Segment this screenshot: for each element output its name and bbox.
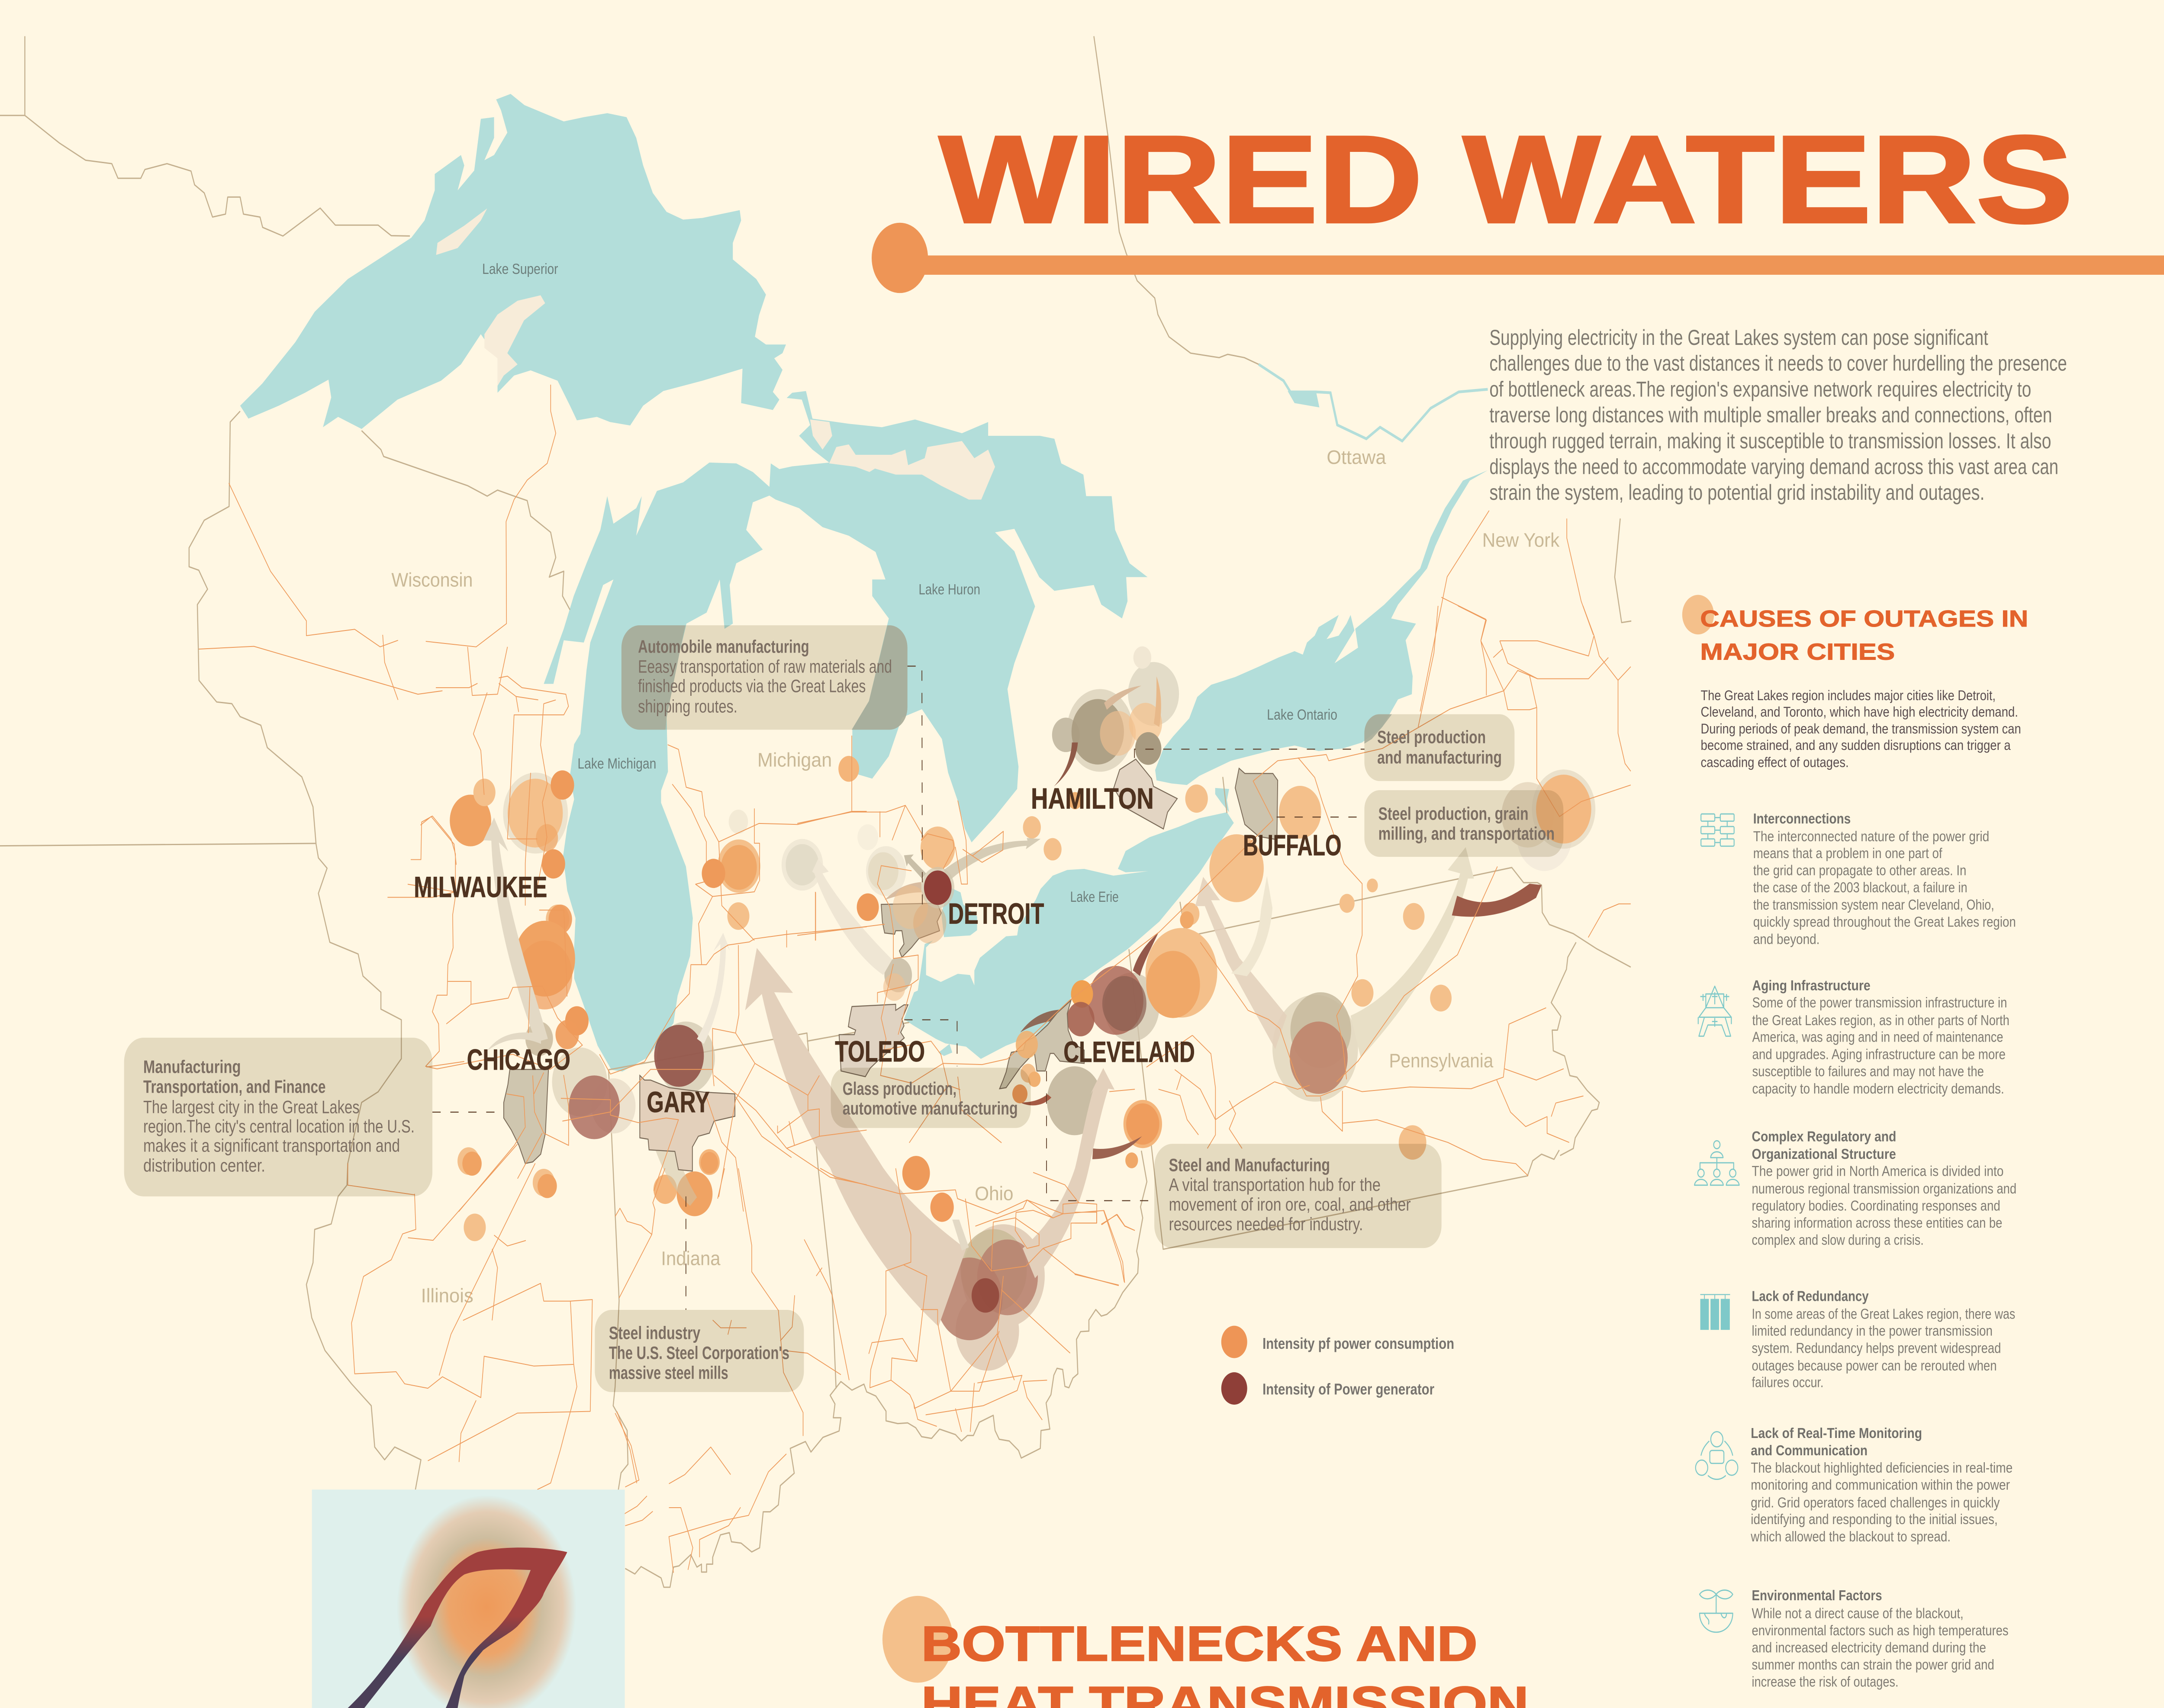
intro paragraph: challenges due to the vast distances it needs to cover hurdelling the presence [1489,351,2067,376]
hamilton up arrow [1154,676,1161,727]
callout: steel and manufacturing: resources needed for industry. [1169,1214,1363,1234]
state and place names: Lake Michigan [578,755,656,772]
niagara water [1215,788,1229,812]
item: environmental factors: summer months can strain the power grid and [1752,1657,1994,1673]
item: environmental factors: environmental factors such as high temperatures [1752,1623,2009,1639]
intro paragraph: traverse long distances with multiple smaller breaks and connections, often [1489,403,2052,427]
city names: GARY [647,1085,710,1118]
panel: causes of outages [1682,595,2028,1690]
title [872,110,2164,293]
heading [1700,606,2028,665]
item: lack of real-time monitoring: monitoring and communication within the power [1751,1477,2010,1493]
callout: steel production hamilton: Steel production [1377,727,1486,747]
buffalo shape [1235,768,1278,840]
bottleneck swoosh [348,1547,567,1708]
callout: steel production buffalo: milling, and transportation [1378,823,1555,843]
callout: steel industry [595,1310,804,1392]
callout: automobile manufacturing: Automobile manufacturing [638,637,809,657]
item: lack of redundancy: limited redundancy in the power transmission [1752,1323,1993,1339]
region paragraph: The Great Lakes region includes major cities like Detroit, [1701,688,1996,704]
state and place names: Lake Superior [482,261,558,277]
item: interconnections: Interconnections [1753,811,1851,827]
icon: org chart [1694,1141,1739,1185]
icon: server racks [1700,1295,1730,1330]
item: interconnections: the grid can propagate to other areas. In [1753,863,1966,878]
lake superior [240,94,786,429]
ottawa river widening [1288,391,1319,407]
intro paragraph: through rugged terrain, making it susceptible to transmission losses. It also [1489,429,2051,453]
item: lack of redundancy: outages because power can be rerouted when [1752,1358,1997,1373]
item: aging infrastructure: Some of the power transmission infrastructure in [1752,995,2007,1011]
state and place names [391,261,1560,1306]
detroit overlay bubbles [893,867,954,944]
item: environmental factors [1700,1588,2009,1690]
keweenaw peninsula [484,295,545,386]
item: environmental factors: Environmental Factors [1752,1588,1882,1604]
icon: network nodes [1701,814,1734,846]
small arrow below cleveland [1020,1094,1051,1105]
drummond island [810,419,832,450]
state and place names: Lake Huron [918,581,980,598]
item: lack of real-time monitoring: and Communication [1751,1443,1868,1459]
state and place names: Indiana [661,1247,721,1269]
item: interconnections: quickly spread throughout the Great Lakes region [1753,914,2016,930]
item: lack of real-time monitoring [1696,1426,2013,1545]
city names [414,782,1341,1118]
callout lake tint [621,620,911,732]
item: complex regulatory structure: The power grid in North America is divided into [1752,1164,2003,1179]
arrow ohio to cleveland [1023,1068,1114,1278]
sandusky inlet [938,1044,952,1056]
legend: power consumption: Intensity pf power consumption [1262,1335,1454,1352]
callout: steel industry: The U.S. Steel Corporation's [609,1343,789,1363]
item: interconnections: the case of the 2003 blackout, a failure in [1753,880,1968,896]
city outlines [504,759,1278,1171]
item: aging infrastructure: the Great Lakes region, as in other parts of North [1752,1013,2009,1029]
intro paragraph: Supplying electricity in the Great Lakes system can pose significant [1489,325,1988,350]
item: complex regulatory structure: complex and slow during a crisis. [1752,1232,1924,1248]
callout: chicago manufacturing: Manufacturing [143,1057,241,1077]
heading dot [1682,595,1714,634]
region paragraph: become strained, and any sudden disruptions can trigger a [1701,738,2011,753]
item: complex regulatory structure: Complex Regulatory and [1752,1129,1896,1145]
callout: chicago manufacturing: region.The city's central location in the U.S. [143,1116,415,1136]
item: aging infrastructure: America, was aging and in need of maintenance [1752,1029,2003,1045]
state and national borders [0,36,1631,1587]
callout: steel industry: Steel industry [609,1323,700,1343]
cleveland shape [1000,1000,1084,1089]
item: complex regulatory structure: numerous regional transmission organizations and [1752,1181,2016,1197]
item: lack of redundancy [1700,1289,2015,1390]
item: lack of real-time monitoring: identifying and responding to the initial issues, [1751,1512,1998,1528]
state and place names: New York [1482,529,1560,551]
item: interconnections: means that a problem in one part of [1753,846,1942,862]
region paragraph: Cleveland, and Toronto, which have high electricity demand. [1701,704,2018,720]
manitoulin island [829,441,995,499]
item: lack of redundancy: In some areas of the Great Lakes region, there was [1752,1306,2015,1322]
city names: MILWAUKEE [414,870,547,904]
section heading: bottlenecks and heat transmission [882,1596,1529,1708]
callout: chicago manufacturing: distribution center. [143,1155,265,1175]
region paragraph: cascading effect of outages. [1701,755,1849,770]
ottawa river [1259,364,1488,441]
small arrow to 44 [1092,1136,1142,1159]
callout: chicago manufacturing: makes it a significant transportation and [143,1135,400,1155]
michigan faint arrow [812,859,892,975]
faint arrow to buffalo [1231,876,1272,976]
callout: steel production buffalo [1364,790,1563,857]
map: great lakes water [240,94,1488,1071]
state and place names: Ohio [975,1182,1014,1204]
ohio faint arrow [952,1219,969,1251]
arrow pittsburgh to east [1351,847,1474,1058]
state and place names: Wisconsin [391,569,473,591]
item: aging infrastructure: Aging Infrastructure [1752,978,1871,994]
gary shape [640,1075,735,1171]
item: environmental factors: and increased electricity demand during the [1752,1640,1986,1656]
detroit shape [881,903,941,957]
callout: steel production hamilton [1364,710,1514,781]
heat glow [397,1495,576,1708]
isle royale [436,209,487,255]
state and place names: Lake Erie [1070,888,1119,905]
icon: communication circle [1696,1431,1738,1480]
big arrow ohio to toledo [745,948,966,1326]
legend [1221,1326,1454,1405]
lake st clair [941,887,977,937]
title: WIRED WATERS [939,110,2073,249]
arrow pittsburgh to erie [1195,877,1287,1049]
callout: steel and manufacturing [1154,1144,1442,1248]
toledo shape [839,1004,908,1077]
lake erie [904,812,1234,1059]
item: environmental factors: While not a direct cause of the blackout, [1752,1606,1964,1621]
callout: steel and manufacturing: A vital transportation hub for the [1169,1174,1381,1195]
legend: power generator [1221,1372,1434,1405]
panel: bottleneck heat illustration [312,1489,625,1708]
milwaukee arrow [483,817,548,1042]
callout lake tint [1364,714,1392,743]
detroit left arrow [885,882,921,900]
city names: BUFFALO [1243,829,1341,862]
state and place names: Lake Ontario [1267,706,1337,723]
item: lack of real-time monitoring: which allowed the blackout to spread. [1750,1529,1951,1545]
item: interconnections: the transmission system near Cleveland, Ohio, [1753,897,1994,913]
chicago small arrow [487,1033,541,1051]
state and place names: Ottawa [1327,446,1386,468]
city names: HAMILTON [1031,782,1154,815]
item: aging infrastructure: and upgrades. Aging infrastructure can be more [1752,1047,2006,1062]
item: interconnections: and beyond. [1753,932,1819,947]
callout: glass production: Glass production, [843,1078,956,1099]
hamilton dark arrow [1054,743,1078,786]
item: lack of redundancy: system. Redundancy helps prevent widespread [1752,1341,2001,1356]
intro paragraph: of bottleneck areas.The region's expansive network requires electricity to [1489,377,2031,401]
city names: CHICAGO [467,1043,570,1076]
legend: power consumption [1221,1326,1454,1358]
callout: automobile manufacturing [621,620,911,732]
cleveland west arrow [1020,1010,1067,1033]
city names: DETROIT [948,897,1044,930]
item: complex regulatory structure: sharing information across these entities can be [1752,1215,2002,1231]
state and place names: Michigan [757,749,832,771]
item: environmental factors: increase the risk of outages. [1752,1674,1898,1690]
item: lack of real-time monitoring: The blackout highlighted deficiencies in real-time [1751,1460,2013,1476]
item: lack of redundancy: Lack of Redundancy [1752,1289,1869,1304]
item: lack of redundancy: failures occur. [1752,1375,1823,1390]
power transmission lines [199,385,1631,1573]
heading: CAUSES OF OUTAGES IN [1700,606,2028,632]
lake ontario and st lawrence [1155,470,1488,785]
gary down arrow [643,1082,697,1206]
callout: steel production buffalo: Steel production, grain [1378,804,1529,823]
hamilton light arrow [1104,685,1141,710]
flow arrows [483,676,1542,1326]
item: lack of real-time monitoring: grid. Grid operators faced challenges in quickly [1751,1495,2000,1511]
connector dashed lines [432,666,1365,1310]
callout: steel industry: massive steel mills [609,1363,728,1383]
intro paragraph [1489,325,2067,505]
item: complex regulatory structure [1694,1129,2016,1248]
item: lack of real-time monitoring: Lack of Real-Time Monitoring [1751,1426,1922,1441]
item: aging infrastructure: capacity to handle modern electricity demands. [1752,1081,2004,1097]
detroit up-left arrow [904,854,926,878]
title bar with dot [872,223,2164,293]
callout: glass production: automotive manufacturing [843,1098,1018,1118]
callout: steel and manufacturing: Steel and Manufacturing [1169,1155,1330,1175]
callout: automobile manufacturing: finished products via the Great Lakes [638,676,866,696]
callout: steel and manufacturing: movement of iron ore, coal, and other [1169,1194,1411,1215]
section heading: bottlenecks and heat transmission: BOTTLENECKS AND [921,1616,1478,1671]
city names: CLEVELAND [1063,1035,1195,1068]
callout: chicago manufacturing [124,1038,432,1197]
cleveland north arrow [1133,933,1159,976]
dark arrow east [1452,884,1542,917]
region paragraph: During periods of peak demand, the transmission system can [1701,721,2021,737]
state and place names: Pennsylvania [1389,1049,1494,1071]
power intensity bubbles [450,647,1595,1371]
region paragraph [1701,688,2021,770]
chicago shape [504,1069,548,1164]
gary up arrow [697,933,730,1044]
lakes michigan and huron with georgian bay [544,391,1147,1071]
callout: chicago manufacturing: Transportation, and Finance [143,1077,326,1097]
item: interconnections [1701,811,2016,947]
item: aging infrastructure: susceptible to failures and may not have the [1752,1064,1984,1080]
heading dot [882,1596,953,1682]
item: complex regulatory structure: regulatory bodies. Coordinating responses and [1752,1198,2000,1214]
intro paragraph: strain the system, leading to potential grid instability and outages. [1489,480,1984,505]
item: aging infrastructure [1698,978,2009,1097]
hamilton shape [1114,759,1177,829]
legend: power generator: Intensity of Power generator [1262,1380,1434,1398]
callout: automobile manufacturing: shipping routes. [638,696,737,716]
state and place names: Illinois [421,1284,473,1306]
icon: sprout and globe [1700,1590,1733,1632]
item: complex regulatory structure: Organizational Structure [1752,1146,1896,1162]
city names: TOLEDO [835,1035,925,1068]
callout: automobile manufacturing: Eeasy transportation of raw materials and [638,656,892,676]
item: interconnections: The interconnected nature of the power grid [1753,829,1989,845]
detroit to hamilton arrow [944,838,1040,882]
callout: glass production [831,1068,1031,1128]
callout: steel production hamilton: and manufacturing [1377,747,1502,768]
intro paragraph: displays the need to accommodate varying demand across this vast area can [1489,454,2058,479]
heading: MAJOR CITIES [1700,639,1895,665]
cleveland overlay bubbles [1012,1031,1040,1103]
callout: chicago manufacturing: The largest city in the Great Lakes [143,1097,360,1117]
icon: transmission tower [1698,986,1731,1036]
